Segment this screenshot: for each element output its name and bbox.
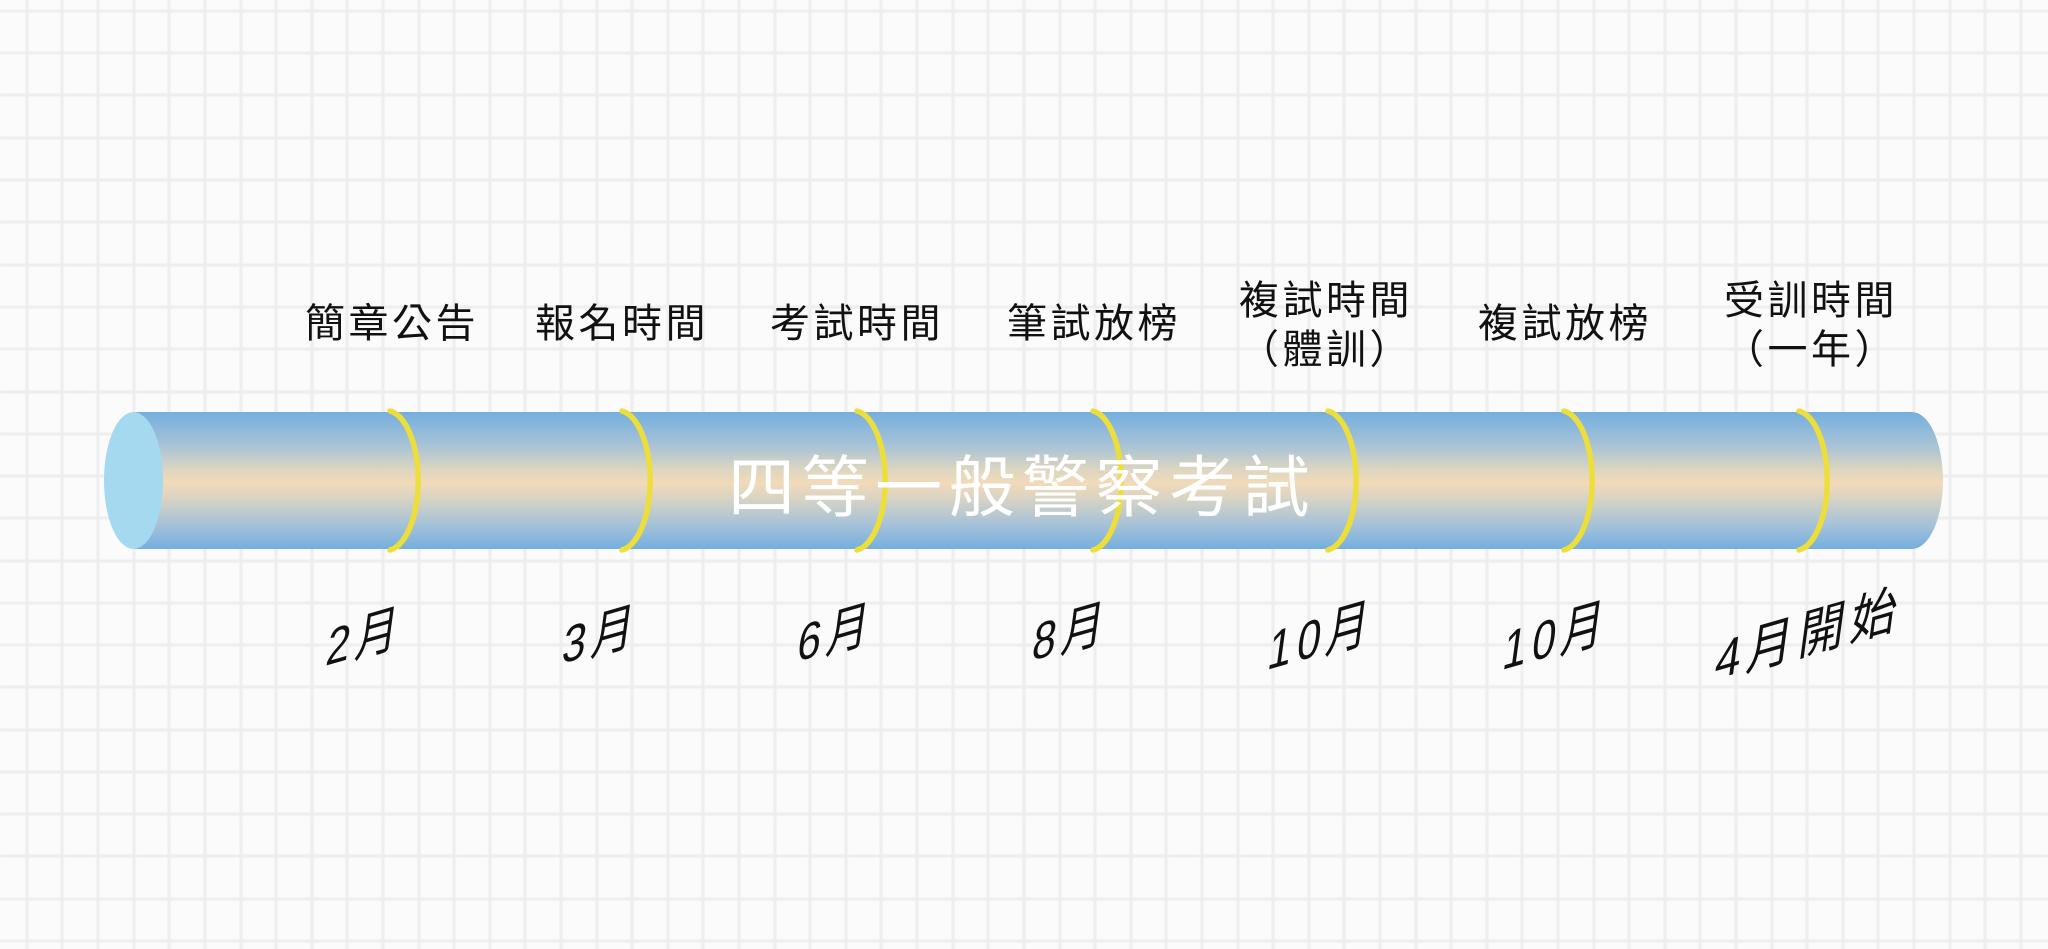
ring marker 4 (1093, 411, 1121, 550)
cylinder left end cap (104, 412, 163, 549)
date: 10月: 10月 (1264, 590, 1379, 682)
date: 10月 second: 10月 (1499, 590, 1614, 682)
date: 2月: 2月 (323, 598, 408, 678)
ring marker 5 (1328, 411, 1356, 550)
label: 複試放榜: 複試放榜 (1478, 302, 1652, 346)
ring marker 2 (622, 411, 650, 550)
date: 4月開始: 4月開始 (1712, 576, 1907, 692)
date: 6月: 6月 (794, 594, 879, 674)
ring marker 3 (857, 411, 885, 550)
date: 8月: 8月 (1029, 593, 1114, 673)
label: 報名時間: 報名時間 (535, 302, 709, 346)
label: 受訓時間（一年）: 受訓時間 (1724, 279, 1898, 323)
cylinder timeline bar (104, 411, 1943, 550)
date: 3月: 3月 (559, 596, 644, 676)
label: 簡章公告: 簡章公告 (305, 302, 479, 346)
label: 受訓時間（一年） (1724, 279, 1898, 372)
label: 複試時間（體訓） (1239, 279, 1413, 372)
ring marker 6 (1564, 411, 1592, 550)
label: 筆試放榜: 筆試放榜 (1007, 302, 1181, 346)
label: 受訓時間（一年）: （一年） (1724, 328, 1898, 372)
title on cylinder: 四等一般警察考試 (728, 451, 1316, 526)
cylinder body (134, 412, 1943, 549)
label: 考試時間: 考試時間 (770, 302, 944, 346)
ring marker 1 (390, 411, 418, 550)
label: 複試時間（體訓）: 複試時間 (1239, 279, 1413, 323)
ring marker 7 (1799, 411, 1827, 550)
label: 複試時間（體訓）: （體訓） (1239, 328, 1413, 372)
